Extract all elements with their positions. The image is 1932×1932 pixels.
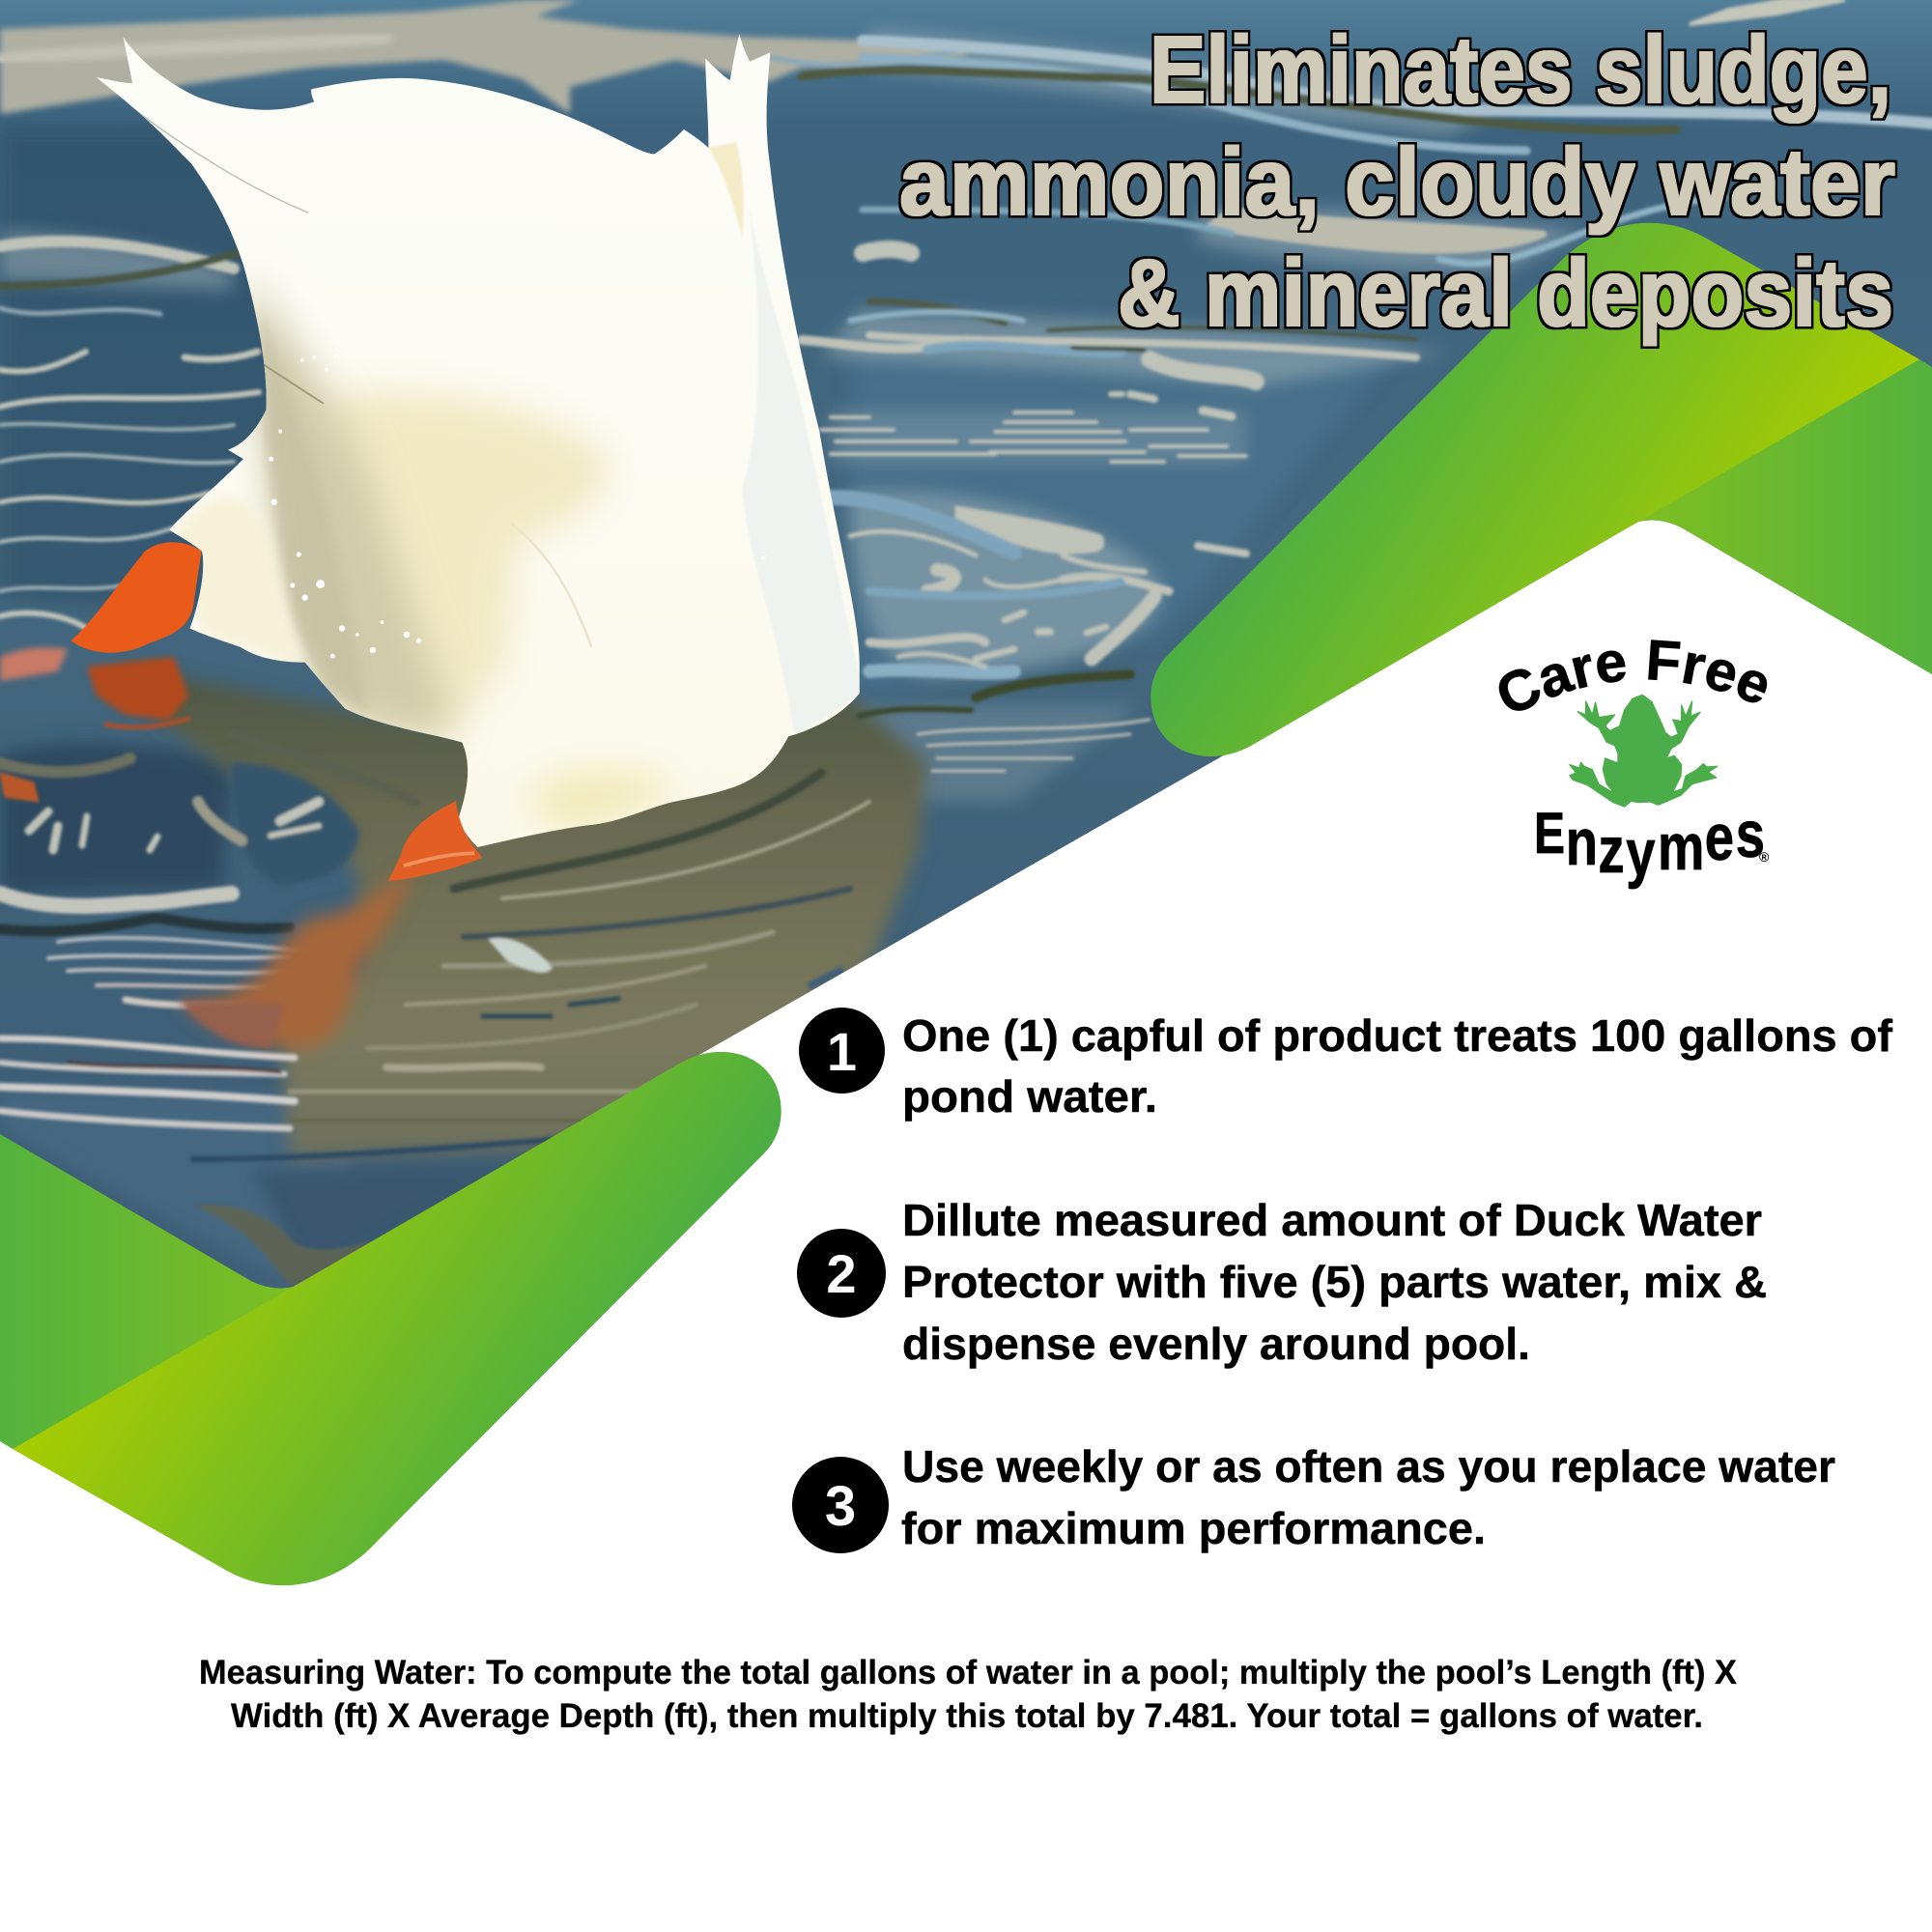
number badge 3: [792, 1457, 889, 1553]
registered mark: ®: [1759, 849, 1770, 865]
step 1 text: One (1) capful of product treats 100 gallons of: [902, 1010, 1893, 1061]
ripples right of duck: [802, 340, 966, 349]
step 3 text: [901, 1441, 1835, 1553]
number badge 2: 2: [826, 1243, 857, 1304]
footer note: measuring water: Measuring Water: To compute the total gallons of water in a pool; multiply the pool’s Length (ft) X: [199, 1654, 1738, 1691]
step 2 text: Protector with five (5) parts water, mix &: [902, 1257, 1767, 1307]
floating feather: [488, 938, 553, 973]
olive area ripples: [232, 734, 415, 802]
light streaks upper right: [863, 41, 1932, 124]
left ripples: [0, 242, 234, 269]
number badge 3: 3: [825, 1475, 856, 1538]
step 3 text: Use weekly or as often as you replace water: [902, 1441, 1835, 1492]
step 3 text: for maximum performance.: [901, 1503, 1486, 1553]
footer note: measuring water: Width (ft) X Average Depth (ft), then multiply this total by 7.481. Your total = gallons of water.: [231, 1697, 1703, 1735]
step 1 text: [902, 1010, 1893, 1122]
step 2 text: Dillute measured amount of Duck Water: [902, 1195, 1762, 1245]
number badge 1: 1: [827, 1021, 857, 1082]
broad highlights on water: [0, 29, 1584, 802]
step 2: [797, 1195, 1767, 1369]
icon: duck feet: [71, 542, 482, 881]
step 2 text: [902, 1195, 1767, 1369]
blue patch with light blotches: [232, 763, 359, 884]
reflection of bird: [193, 1205, 376, 1285]
orange reflection below duck: [179, 865, 415, 1048]
number badge 2: [797, 1229, 886, 1318]
foot reflections: [0, 647, 68, 681]
logo: Care Free Enzymes: [1499, 639, 1770, 890]
step 1: [799, 1008, 1893, 1122]
green band: lower-left front: [13, 1052, 781, 1585]
green band: upper-right back: [1604, 359, 1932, 674]
step 2 text: dispense evenly around pool.: [902, 1319, 1530, 1369]
olive reflection: [126, 667, 927, 1159]
title: [899, 16, 1895, 346]
logo text: Care Free: Care Free: [1499, 639, 1768, 711]
top taupe band: [0, 0, 966, 114]
lower left ripples: [0, 758, 130, 772]
logo text: Enzymes: Enzymes: [1534, 798, 1765, 890]
photo: duck diving in pond water: [0, 0, 1932, 1289]
step 3: [792, 1441, 1835, 1553]
number badge 1: [799, 1008, 885, 1094]
title: ammonia, cloudy water: [899, 128, 1895, 235]
white lower-right background: [0, 520, 1932, 1932]
green band: lower-left back: [0, 1134, 328, 1449]
icon: green frog: [1570, 695, 1718, 807]
step 1 text: pond water.: [902, 1071, 1157, 1122]
footer note: measuring water: [199, 1654, 1738, 1735]
water ripples: [0, 0, 1932, 1159]
lower left white bands: [0, 1038, 295, 1058]
icon: duck body: [96, 34, 863, 847]
green band: upper-right front: [1151, 223, 1919, 756]
